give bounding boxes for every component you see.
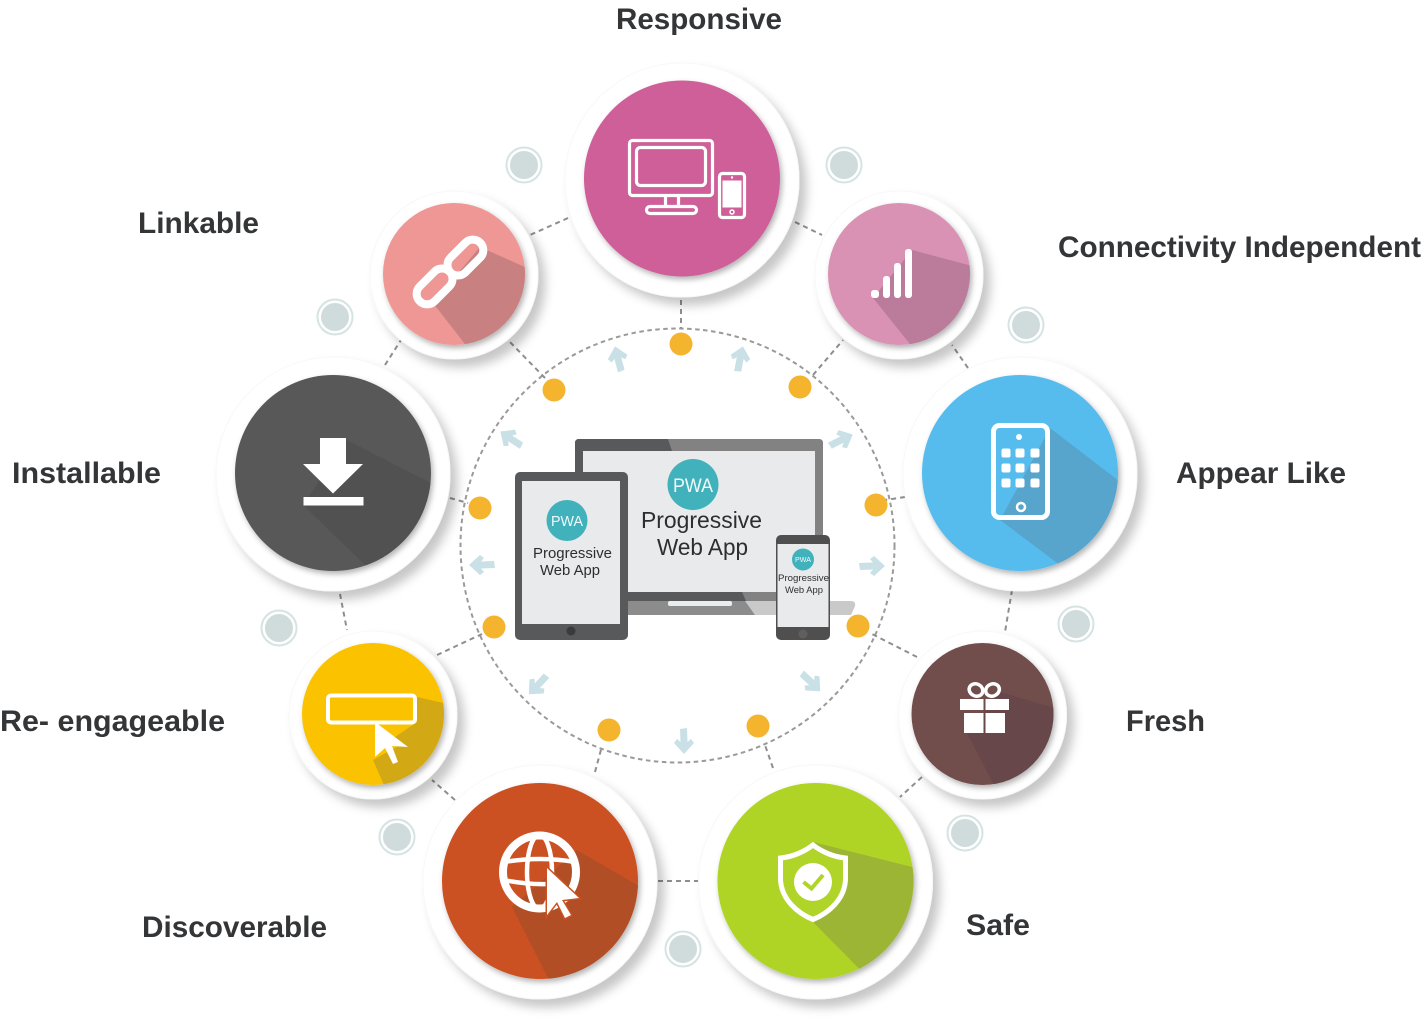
label: Discoverable: Discoverable [142, 911, 327, 944]
icon: gift [960, 682, 1009, 733]
central devices illustration [515, 439, 855, 640]
icon: shield with check [780, 845, 846, 920]
node: Connectivity Independent [815, 191, 1000, 370]
node: Re-engageable [289, 631, 470, 801]
laptop: Progressive [641, 507, 762, 533]
laptop [575, 439, 855, 615]
phone: Web App [785, 585, 823, 596]
node: Installable [216, 357, 470, 600]
node: Responsive [565, 63, 799, 297]
label: Safe: Safe [966, 909, 1030, 942]
tablet: PWA [551, 513, 583, 530]
node: Linkable [370, 191, 560, 370]
icon: phone with app grid [994, 426, 1048, 518]
node: Safe [698, 765, 945, 1000]
tablet: Web App [540, 563, 600, 579]
phone: PWA [795, 555, 811, 564]
phone: Progressive [778, 573, 829, 584]
label: Fresh: Fresh [1126, 705, 1205, 738]
icon: chain link [412, 235, 488, 309]
laptop: PWA [673, 476, 713, 497]
tablet: Progressive [533, 546, 612, 562]
decorative grey-green dots [262, 148, 1094, 966]
phone [776, 535, 830, 640]
node: Fresh [898, 631, 1080, 802]
label: Connectivity Independent: Connectivity Independent [1058, 231, 1421, 264]
icon: signal bars [871, 249, 912, 298]
orange connector dots [468, 332, 888, 742]
label: Installable: Installable [12, 457, 161, 490]
laptop: Web App [657, 534, 748, 560]
node: Discoverable [423, 765, 670, 1002]
icon: download arrow [303, 438, 364, 506]
label: Re- engageable: Re- engageable [0, 705, 225, 738]
tablet [515, 472, 628, 640]
label: Responsive: Responsive [616, 3, 782, 36]
icon: input box with cursor [328, 696, 415, 764]
dashed central ring and connectors [340, 218, 1012, 881]
label: Appear Like: Appear Like [1176, 457, 1346, 490]
icon: monitor and phone [630, 140, 744, 218]
light blue outward arrows [469, 344, 885, 754]
label: Linkable: Linkable [138, 207, 259, 240]
node: Appear Like [903, 357, 1160, 600]
icon: globe with cursor [503, 835, 579, 918]
